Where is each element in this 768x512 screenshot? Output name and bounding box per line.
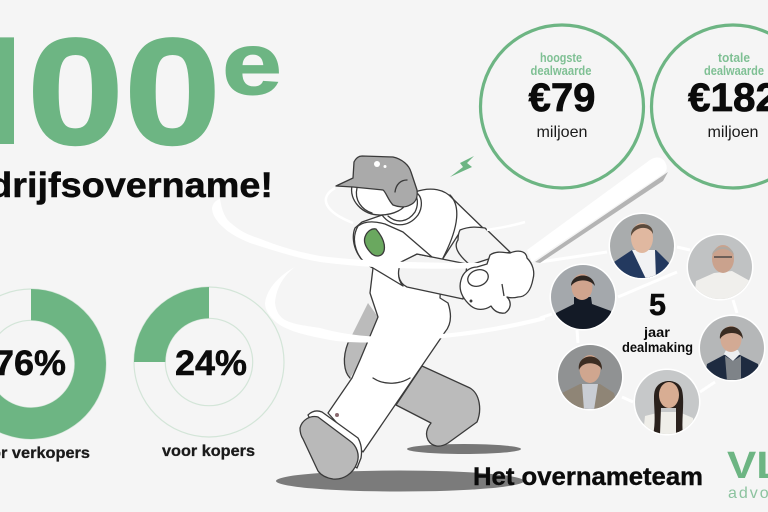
team portrait 3 bbox=[550, 264, 616, 330]
icon: lightning bolt bbox=[450, 156, 474, 177]
helmet bbox=[336, 156, 417, 207]
stat circle: hoogste dealwaarde: dealwaarde bbox=[530, 64, 592, 78]
team tenure label: dealmaking bbox=[622, 339, 693, 355]
torso side line bbox=[443, 195, 457, 258]
donut chart: 24% voor kopers: voor kopers bbox=[162, 443, 255, 460]
motion swoosh: around helmet bbox=[326, 188, 525, 230]
team heading: Het overnameteam bbox=[473, 463, 703, 491]
sleeve badge bbox=[364, 229, 384, 256]
team portrait 1 bbox=[608, 212, 676, 280]
illustration: baseball batter bbox=[300, 156, 668, 479]
team tenure label bbox=[622, 287, 693, 355]
motion swoosh: upper bbox=[212, 199, 535, 269]
donut chart: 24% voor kopers bbox=[134, 287, 284, 460]
head back line bbox=[356, 188, 372, 213]
team connector bands bbox=[540, 247, 737, 402]
team tenure label: 5 bbox=[649, 287, 666, 322]
forearm bbox=[398, 254, 467, 299]
stat circle: hoogste dealwaarde: miljoen bbox=[536, 124, 588, 141]
knee crease and dot bbox=[335, 378, 410, 417]
team portrait 4 bbox=[698, 314, 766, 382]
ground shadows bbox=[276, 444, 524, 492]
shoe bbox=[300, 411, 362, 479]
stat circle: hoogste dealwaarde: hoogste bbox=[540, 51, 582, 65]
motion swoosh: lower bbox=[265, 267, 545, 343]
team portrait 6 bbox=[634, 368, 700, 436]
back arm and back leg bbox=[344, 303, 480, 446]
stat circle: totale dealwaarde: miljoen bbox=[708, 124, 758, 141]
stat circle: totale dealwaarde: totale bbox=[718, 51, 750, 65]
torso and front leg bbox=[328, 189, 483, 452]
title: 100e bbox=[0, 37, 279, 146]
stat circle: hoogste dealwaarde: €79 bbox=[528, 76, 596, 120]
donut chart: 76% voor verkopers bbox=[0, 289, 106, 462]
bat bbox=[527, 158, 668, 263]
team portrait 5 bbox=[556, 344, 624, 410]
head bbox=[352, 186, 405, 215]
title: 100e: 0 bbox=[27, 7, 124, 177]
front arm bbox=[354, 222, 432, 286]
collar bbox=[382, 194, 421, 225]
stat circle: totale dealwaarde bbox=[652, 25, 768, 188]
rear arm bbox=[456, 227, 510, 265]
title: 100e: 0 bbox=[124, 7, 221, 177]
stat circle: hoogste dealwaarde bbox=[480, 25, 644, 188]
team tenure label: jaar bbox=[643, 324, 671, 340]
donut chart: 24% voor kopers: 24% bbox=[175, 344, 247, 383]
team portrait 2 bbox=[686, 234, 754, 300]
gloves bbox=[460, 251, 534, 313]
title: 100e: e bbox=[222, 14, 282, 113]
